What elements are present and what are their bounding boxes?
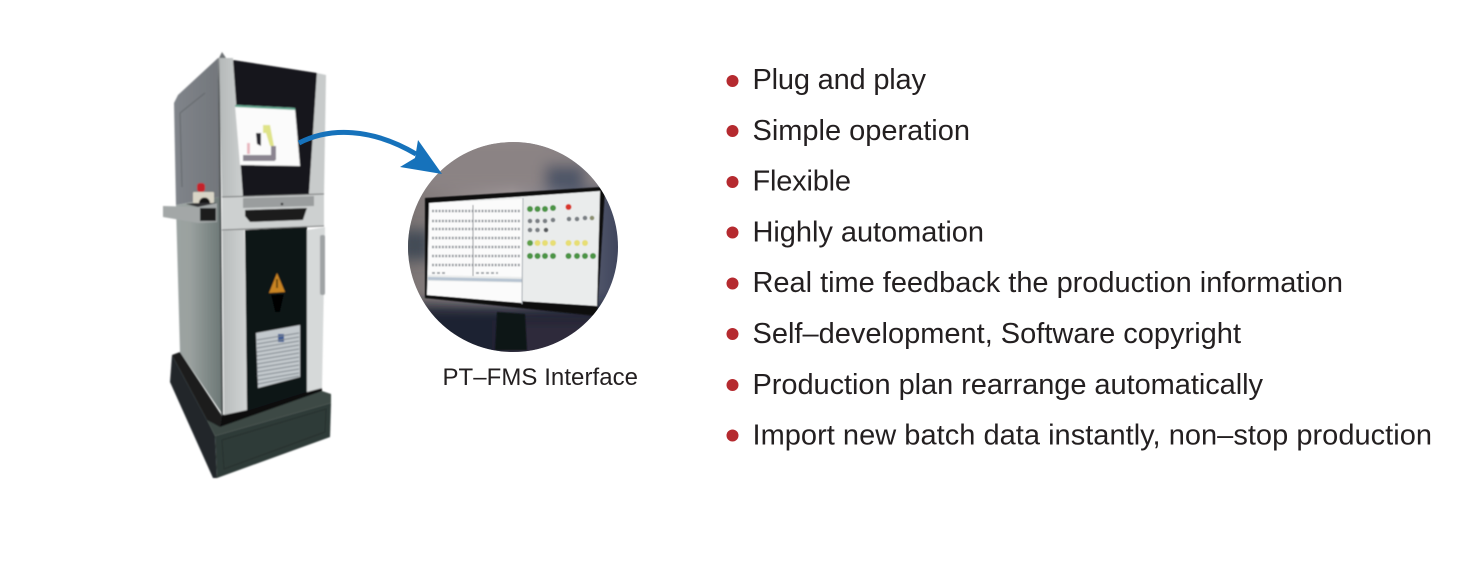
circular interface photo (408, 142, 618, 352)
side panel (174, 52, 226, 415)
middle belt (222, 194, 324, 231)
bullet item: simple operation: Simple operation (752, 115, 970, 147)
tray with emergency stop (163, 183, 217, 223)
monitor status indicators (527, 204, 596, 259)
cabinet display screen (235, 105, 300, 166)
bullet item: highly automation: Highly automation (752, 216, 984, 248)
ventilation grille (256, 325, 300, 388)
caption: PT–FMS Interface (442, 364, 638, 391)
warning triangle (269, 273, 285, 312)
front lower black panel (245, 226, 307, 411)
cabinet base (170, 352, 331, 478)
front left pillar (219, 58, 247, 415)
machine cabinet photo (163, 52, 331, 478)
front upper black panel (233, 60, 317, 197)
bullet item: import new batch: Import new batch data instantly, non–stop production (752, 420, 1432, 452)
monitor (425, 187, 605, 350)
monitor table panel (427, 198, 523, 304)
bullet item: flexible: Flexible (752, 166, 851, 198)
bullet item: self-development: Self–development, Software copyright (752, 318, 1241, 350)
blurred background (408, 142, 606, 352)
feature list (726, 64, 1432, 452)
arrow from cabinet screen to interface (299, 132, 442, 174)
bullet item: plug and play: Plug and play (752, 64, 926, 96)
bullet item: production plan: Production plan rearrange automatically (752, 369, 1264, 401)
right pillar (309, 73, 326, 195)
bullet item: real time feedback: Real time feedback the production information (752, 267, 1343, 299)
